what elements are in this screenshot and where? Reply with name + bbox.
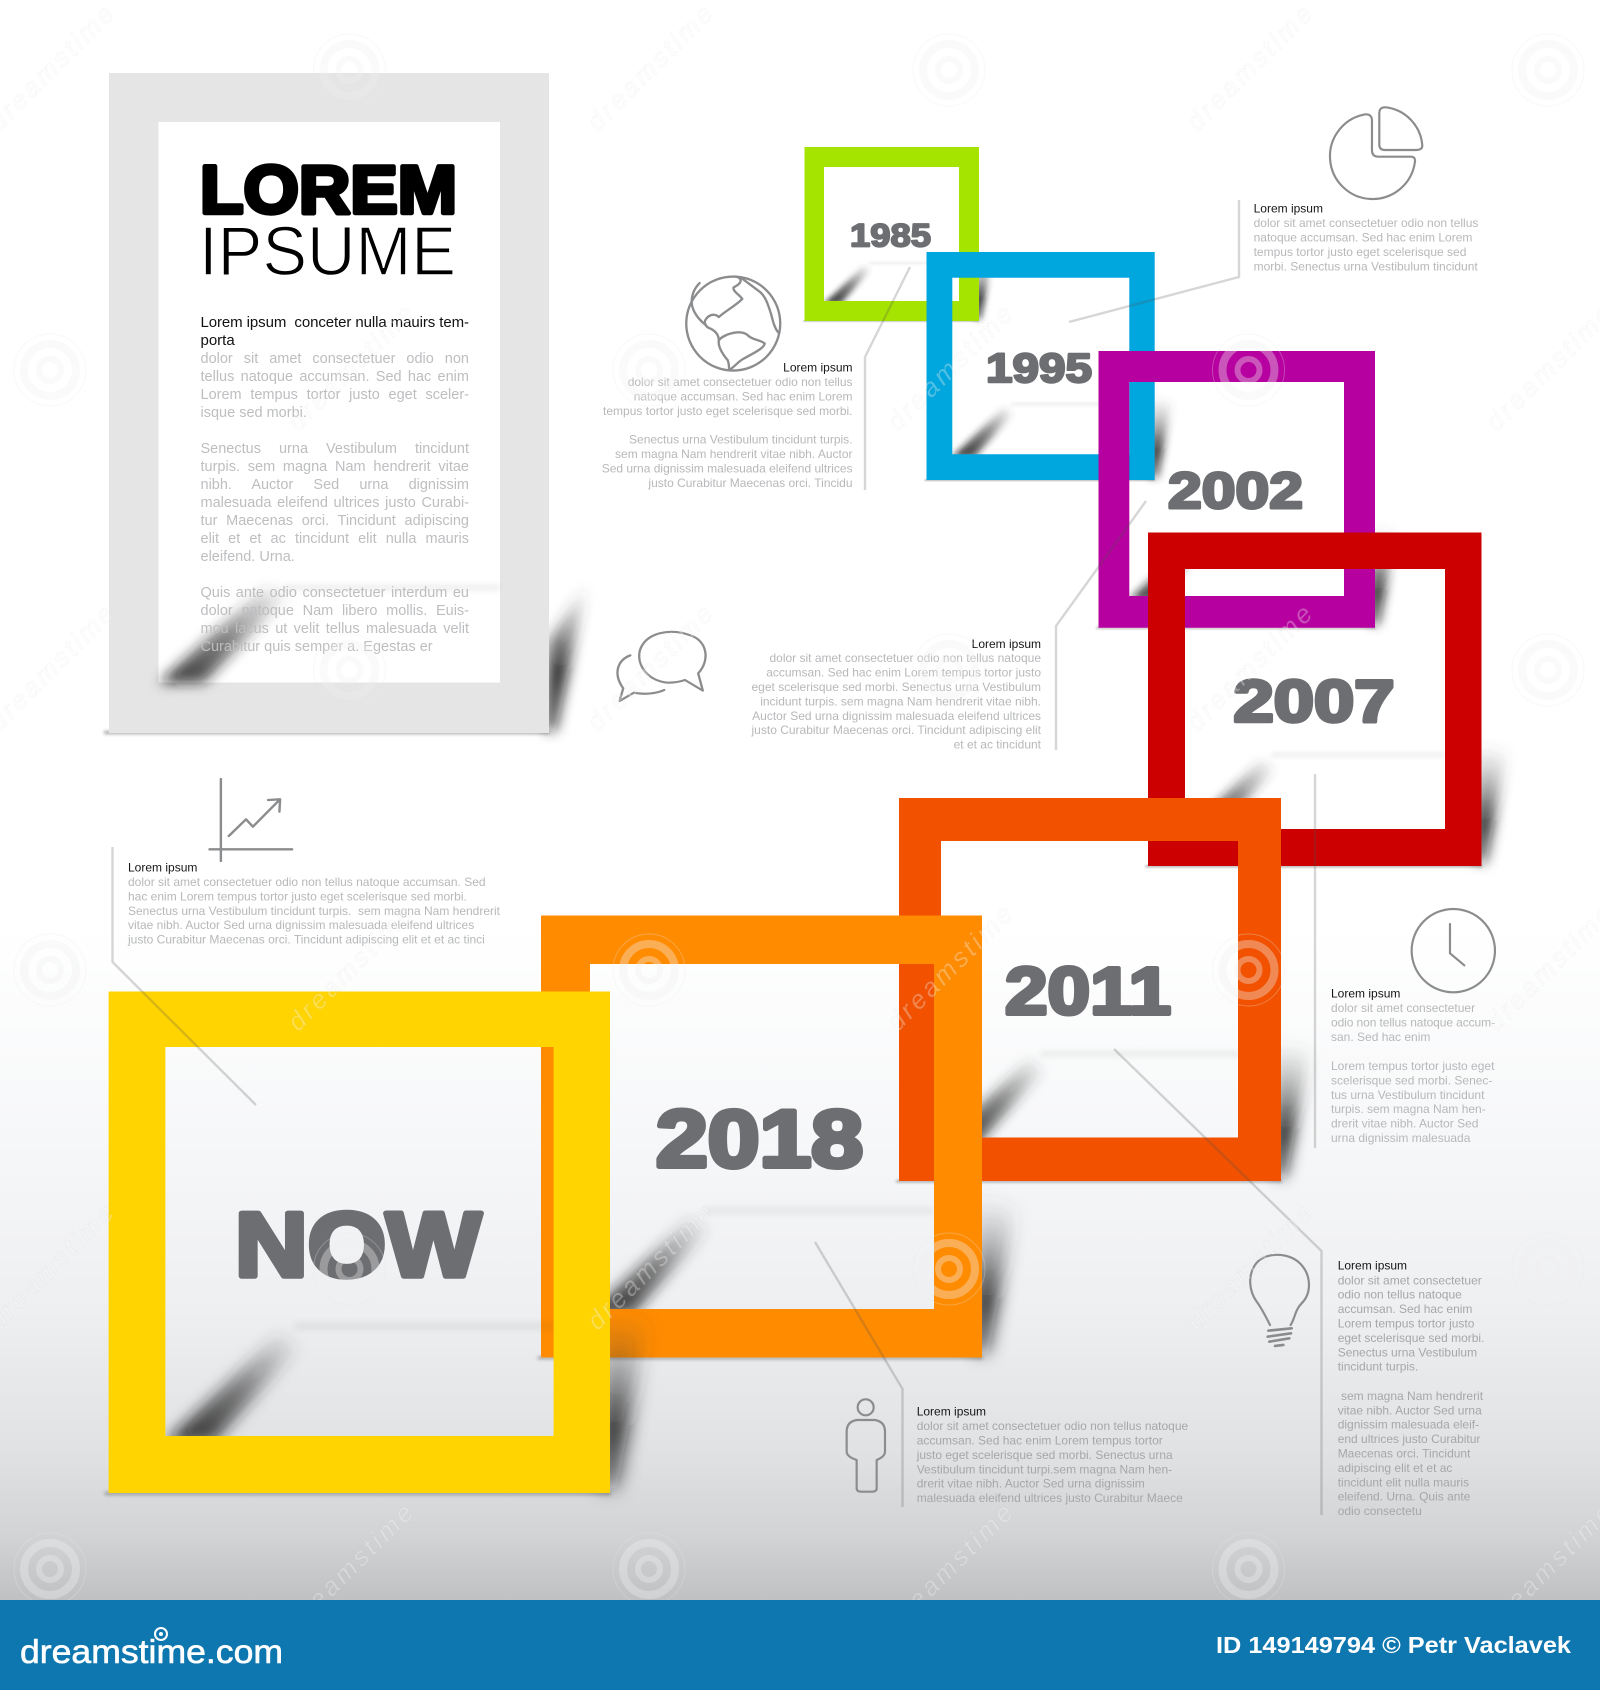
text: pie block: natoque accumsan. Sed hac enim Lorem (1254, 230, 1472, 244)
text: speech block: dolor sit amet consectetuer odio non tellus natoque (769, 651, 1041, 665)
text: clock block: Lorem ipsum (1331, 987, 1400, 1001)
frame: NOW yellow: NOW (235, 1195, 481, 1296)
watermark pattern: dreamstime (881, 1498, 1019, 1636)
text: bulb block: accumsan. Sed hac enim (1338, 1302, 1472, 1316)
intro body text (200, 350, 470, 670)
text: chart block: justo Curabitur Maecenas orci. Tincidunt adipiscing elit et et ac tinci (127, 933, 485, 947)
text: pie block: morbi. Senectus urna Vestibulum tincidunt (1254, 259, 1478, 273)
frame: 2007 red (1145, 532, 1507, 867)
icon: clock (1412, 909, 1495, 992)
intro body text: Curabitur quis semper a. Egestas er (200, 639, 433, 655)
intro body text: dolor sit amet consectetuer odio non (200, 351, 469, 367)
intro body text: eleifend. Urna. (200, 549, 295, 565)
footer logo: dreamstime.com (20, 1633, 283, 1670)
text: person block: malesuada eleifend ultrices justo Curabitur Maece (917, 1491, 1183, 1505)
text: bulb block: eget scelerisque sed morbi. (1338, 1331, 1484, 1345)
frame: 1985 green: 1985 (850, 218, 931, 254)
text: clock block (1331, 987, 1495, 1145)
intro body text: Quis ante odio consectetuer interdum eu (200, 585, 469, 601)
text: bulb block: Lorem ipsum (1338, 1258, 1407, 1272)
text: chart block: Lorem ipsum (128, 861, 197, 875)
intro body text: isque sed morbi. (200, 405, 307, 421)
text: clock block: urna dignissim malesuada (1331, 1131, 1471, 1145)
text: clock block: san. Sed hac enim (1331, 1030, 1430, 1044)
frame: 2018 orange: 2018 (656, 1094, 863, 1184)
intro body text: dolor natoque Nam libero mollis. Euis- (200, 603, 469, 619)
text: bulb block: eleifend. Urna. Quis ante (1338, 1490, 1471, 1504)
text: globe block: sem magna Nam hendrerit vitae nibh. Auctor (615, 447, 853, 461)
intro lead text: Lorem ipsum conceter nulla mauirs tem- (200, 314, 469, 331)
text: speech block: Auctor Sed urna dignissim malesuada eleifend ultrices (752, 709, 1041, 723)
text: speech block (751, 637, 1042, 752)
intro body text: Senectus urna Vestibulum tincidunt (200, 441, 469, 457)
watermark pattern: dreamstime (281, 899, 419, 1037)
text: bulb block: dolor sit amet consectetuer (1338, 1273, 1482, 1287)
leader lines (112, 200, 1322, 1515)
footer bar (0, 1600, 1600, 1690)
watermark pattern: dreamstime (1180, 1198, 1318, 1336)
text: chart block: dolor sit amet consectetuer odio non tellus natoque accumsan. Sed (128, 875, 486, 889)
text: chart block: Senectus urna Vestibulum tincidunt turpis. sem magna Nam hendrerit (128, 904, 501, 918)
text: clock block: drerit vitae nibh. Auctor Sed (1331, 1117, 1478, 1131)
text: clock block: turpis. sem magna Nam hen- (1331, 1102, 1486, 1116)
frame: 2011 orange-red (896, 798, 1310, 1183)
text: globe block: natoque accumsan. Sed hac enim Lorem (634, 389, 853, 403)
text: bulb block: Lorem tempus tortor justo (1338, 1316, 1475, 1330)
watermark pattern: dreamstime (281, 1498, 419, 1636)
text: clock block: odio non tellus natoque accum- (1331, 1016, 1495, 1030)
watermark pattern: dreamstime (281, 299, 419, 437)
text: bulb block: tincidunt turpis. (1338, 1360, 1418, 1374)
watermark pattern: dreamstime (1180, 0, 1318, 137)
text: speech block: et et ac tincidunt (954, 738, 1042, 752)
intro body text: turpis. sem magna Nam hendrerit vitae (200, 459, 469, 475)
icon: pie chart (1330, 107, 1422, 199)
frame: 1995 blue (925, 252, 1172, 481)
text: person block: drerit vitae nibh. Auctor Sed urna dignissim (917, 1477, 1145, 1491)
text: speech block: incidunt turpis. sem magna Nam hendrerit vitae nibh. (760, 694, 1041, 708)
text: clock block: Lorem tempus tortor justo eget (1331, 1059, 1495, 1073)
intro body text: Lorem tempus tortor justo eget sceler- (200, 387, 469, 403)
intro body text: mod lacus ut velit tellus malesuada velit (200, 621, 469, 637)
text: pie block: tempus tortor justo eget scelerisque sed (1254, 245, 1466, 259)
text: bulb block: sem magna Nam hendrerit (1341, 1389, 1484, 1403)
icon: person (847, 1399, 885, 1492)
text: bulb block: dignissim malesuada eleif- (1338, 1418, 1479, 1432)
text: speech block: Lorem ipsum (972, 637, 1041, 651)
frame: 2002 purple: 2002 (1168, 462, 1303, 519)
title: LOREM (200, 152, 457, 228)
text: person block: justo eget scelerisque sed morbi. Senectus urna (916, 1448, 1173, 1462)
watermark pattern: dreamstime (581, 599, 719, 737)
frame: 2007 red: 2007 (1234, 668, 1394, 734)
frame: 2002 purple (1096, 351, 1396, 629)
intro body text: nibh. Auctor Sed urna dignissim (200, 477, 469, 493)
icon: globe (686, 277, 780, 371)
intro body text: elit et et ac tincidunt elit nulla mauris (200, 531, 469, 547)
frame: 1995 blue: 1995 (986, 345, 1092, 391)
intro body text: malesuada eleifend ultrices justo Curabi- (200, 495, 469, 511)
text: bulb block: odio non tellus natoque (1338, 1288, 1462, 1302)
frame: NOW yellow (105, 992, 648, 1495)
frame: 2011 orange-red: 2011 (1005, 954, 1171, 1029)
frame: 1985 green (803, 147, 992, 322)
text: globe block: Sed urna dignissim malesuada eleifend ultrices (602, 461, 852, 475)
text: globe block: tempus tortor justo eget scelerisque sed morbi. (603, 404, 852, 418)
text: globe block: dolor sit amet consectetuer odio non tellus (628, 375, 852, 389)
text: chart block: vitae nibh. Auctor Sed urna dignissim malesuada eleifend ultrices (128, 918, 474, 932)
text: chart block: hac enim Lorem tempus tortor justo eget scelerisque sed morbi. (128, 889, 467, 903)
intro lead text (200, 314, 469, 349)
title (199, 152, 457, 290)
text: clock block: tus urna Vestibulum tincidunt (1331, 1088, 1485, 1102)
intro body text: tellus natoque accumsan. Sed hac enim (200, 369, 469, 385)
text: globe block: Senectus urna Vestibulum tincidunt turpis. (629, 433, 852, 447)
text: bulb block: adipiscing elit et et ac (1338, 1461, 1452, 1475)
watermark pattern: dreamstime (881, 899, 1019, 1037)
watermark pattern: dreamstime (1180, 599, 1318, 737)
text: globe block: justo Curabitur Maecenas orci. Tincidu (647, 476, 852, 490)
intro lead text: porta (200, 332, 235, 349)
footer credit: ID 149149794 © Petr Vaclavek (1216, 1632, 1571, 1658)
title: IPSUME (199, 212, 456, 290)
text: globe block: Lorem ipsum (783, 361, 853, 375)
watermark pattern: dreamstime (881, 299, 1019, 437)
text: speech block: justo Curabitur Maecenas orci. Tincidunt adipiscing elit (751, 723, 1042, 737)
watermark pattern: dreamstime (581, 0, 719, 137)
text: bulb block: Senectus urna Vestibulum (1338, 1345, 1477, 1359)
text: speech block: eget scelerisque sed morbi. Senectus urna Vestibulum (752, 680, 1041, 694)
text: speech block: accumsan. Sed hac enim Lorem tempus tortor justo (766, 666, 1041, 680)
frame: 2018 orange (537, 916, 1016, 1359)
intro body text: tur Maecenas orci. Tincidunt adipiscing (200, 513, 469, 529)
text: person block: Lorem ipsum (917, 1405, 986, 1419)
text: bulb block: end ultrices justo Curabitur (1338, 1432, 1480, 1446)
text: person block: accumsan. Sed hac enim Lorem tempus tortor (917, 1434, 1163, 1448)
text: pie block: Lorem ipsum (1254, 202, 1323, 216)
watermark pattern: dreamstime (581, 1198, 719, 1336)
text: bulb block: Maecenas orci. Tincidunt (1338, 1446, 1471, 1460)
text: person block: dolor sit amet consectetuer odio non tellus natoque (917, 1419, 1189, 1433)
text: person block: Vestibulum tincidunt turpi.sem magna Nam hen- (917, 1462, 1172, 1476)
text: clock block: scelerisque sed morbi. Senec- (1331, 1073, 1492, 1087)
icon: growth chart (210, 779, 292, 861)
icon: light bulb (1250, 1255, 1309, 1346)
text: bulb block: tincidunt elit nulla mauris (1338, 1475, 1469, 1489)
text: person block (916, 1405, 1189, 1505)
text: pie block (1254, 202, 1478, 273)
text: chart block (127, 861, 501, 947)
text: bulb block: vitae nibh. Auctor Sed urna (1338, 1403, 1482, 1417)
icon: speech bubbles (617, 632, 706, 701)
text: bulb block: odio consectetu (1338, 1504, 1422, 1518)
panel: intro text card (104, 73, 587, 734)
text: clock block: dolor sit amet consectetuer (1331, 1001, 1475, 1015)
text: globe block (602, 361, 853, 490)
text: pie block: dolor sit amet consectetuer odio non tellus (1254, 216, 1478, 230)
text: bulb block (1338, 1258, 1484, 1518)
